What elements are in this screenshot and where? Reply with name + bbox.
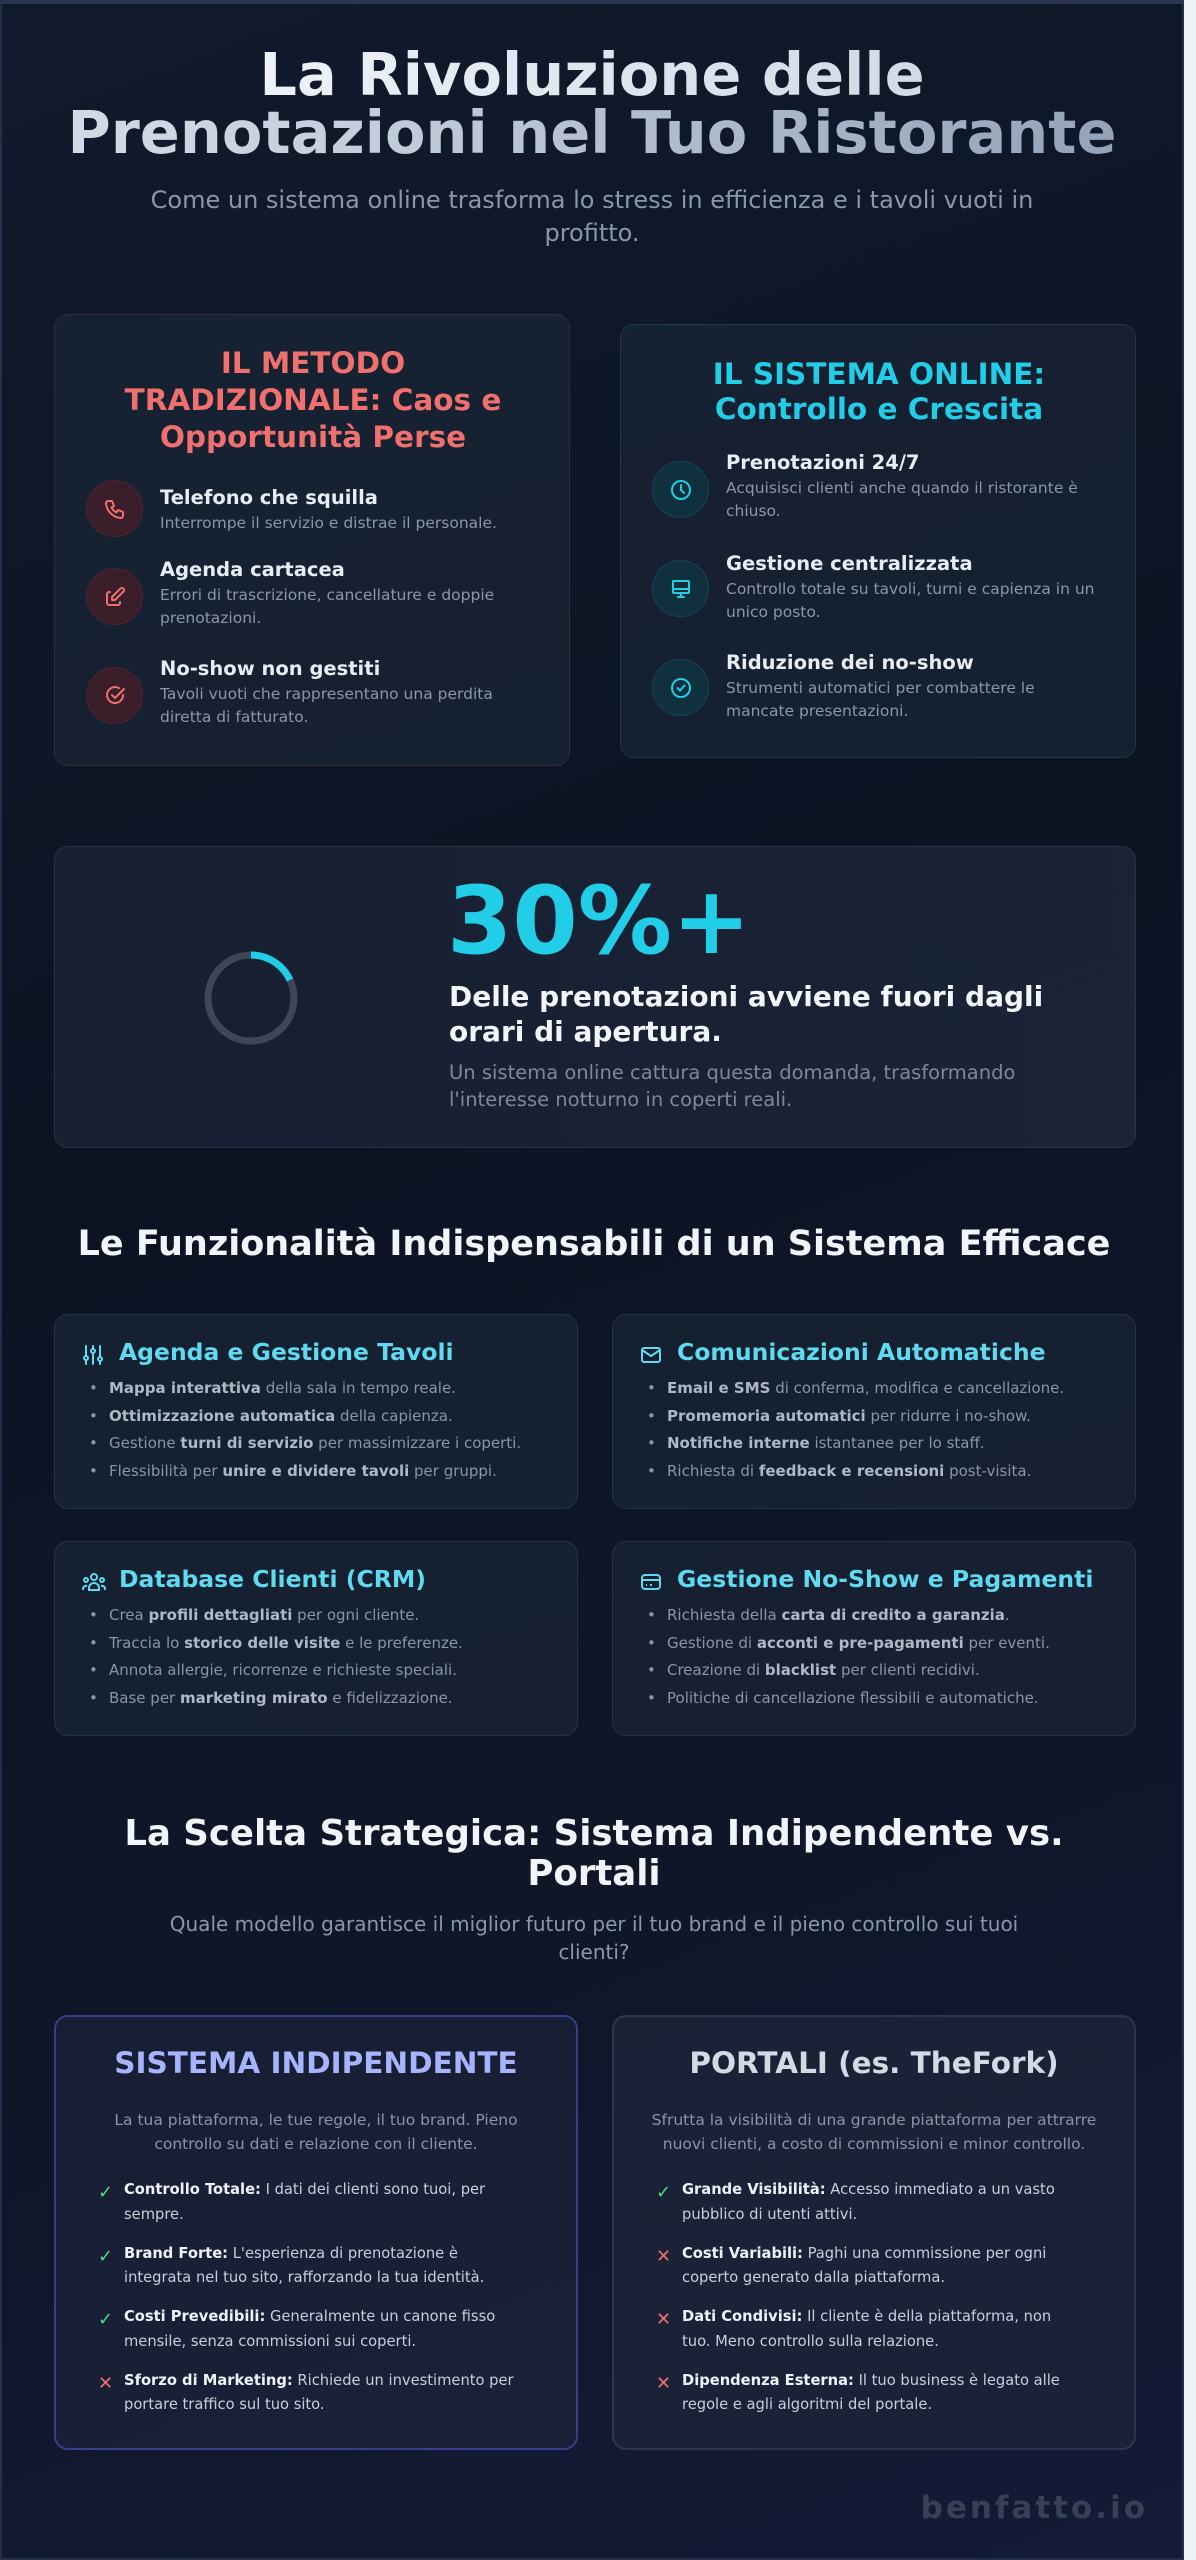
checklist [98,2181,514,2413]
heading: features: Le Funzionalità Indispensabili di un Sistema Efficace [78,1224,1110,1264]
checklist: Controllo Totale: I dati dei clienti sono tuoi, per sempre. [124,2181,485,2222]
bullet list: Promemoria automatici per ridurre i no-show. [667,1407,1031,1425]
bullet list: Crea profili dettagliati per ogni cliente. [109,1606,419,1624]
panel: online system: Controllo totale su tavoli, turni e capienza in un unico posto. [726,580,1094,621]
checklist: tuo. Meno controllo sulla relazione. [682,2332,939,2350]
checklist: ✕ [656,2246,671,2266]
stat description: Un sistema online cattura questa domanda, trasformando [449,1061,1015,1084]
checklist: ✕ [656,2309,671,2330]
bullet list: Annota allergie, ricorrenze e richieste speciali. [109,1661,457,1679]
panel: traditional method: Agenda cartacea [160,558,345,581]
panel: traditional method: Errori di trascrizione, cancellature e doppie prenotazioni. [160,586,494,627]
panel heading: online: Controllo e Crescita [715,392,1043,426]
checklist: ✓ [98,2182,113,2203]
bullet list: Richiesta della carta di credito a garanzia. [667,1606,1010,1624]
bullet list: Flessibilità per unire e dividere tavoli per gruppi. [109,1462,497,1480]
item: agenda [86,558,494,627]
bullet list: Base per marketing mirato e fidelizzazione. [109,1689,453,1707]
panel heading: SISTEMA INDIPENDENTE [114,2046,518,2080]
icon: clock [652,461,709,518]
panel: online system [620,324,1136,758]
checklist: Brand Forte: L'esperienza di prenotazione è [124,2244,458,2262]
title: Prenotazioni nel Tuo Ristorante [67,98,1117,167]
feature heading: Database Clienti (CRM) [119,1565,426,1593]
stat description: l'interesse notturno in coperti reali. [449,1088,792,1111]
item: centralized [652,552,1094,621]
icon: users [82,1573,106,1591]
panel: traditional method: Interrompe il servizio e distrae il personale. [160,514,497,532]
footer logo: benfatto.io [921,2490,1148,2526]
panel heading: PORTALI (es. TheFork) [689,2046,1059,2080]
bullet list: Gestione di acconti e pre-pagamenti per eventi. [667,1634,1050,1652]
heading: strategic choice: Portali [527,1853,661,1894]
checklist: ✓ [98,2246,113,2266]
bullet list: Richiesta di feedback e recensioni post-visita. [667,1462,1031,1480]
subtitle: Come un sistema online trasforma lo stress in efficienza e i tavoli vuoti in profitto. [151,186,1033,247]
checklist: ✓ [98,2309,113,2330]
icon: monitor [652,560,709,617]
checklist: Grande Visibilità: Accesso immediato a un vasto pubblico di utenti attivi. [682,2181,1055,2222]
panel: portals [612,2015,1136,2450]
bullet list: Politiche di cancellazione flessibili e automatiche. [667,1689,1039,1707]
checklist: Dipendenza Esterna: Il tuo business è legato alle regole e agli algoritmi del portale. [682,2372,1060,2413]
bullet list: Ottimizzazione automatica della capienza. [109,1407,453,1425]
panel: online system: Prenotazioni 24/7 [726,451,920,474]
panel: traditional method [54,314,570,766]
checklist: integrata nel tuo sito, rafforzando la tua identità. [124,2269,484,2286]
panel: communications [612,1314,1136,1509]
panel heading: traditional [124,346,501,454]
checklist: ✕ [656,2372,671,2394]
feature heading: Gestione No-Show e Pagamenti [677,1565,1093,1593]
checklist: Costi Variabili: Paghi una commissione per ogni coperto generato dalla piattaforma. [682,2244,1046,2286]
description: La tua piattaforma, le tue regole, il tuo brand. Pieno controllo su dati e relazione con il cliente. [114,2111,518,2152]
panel: online system: Gestione centralizzata [726,552,973,575]
item: no-show reduction [652,651,1035,720]
icon: edit [86,568,143,625]
panel: statistic [54,846,1136,1148]
panel: traditional method: Tavoli vuoti che rappresentano una perdita [160,685,493,703]
bullet list [649,1606,1050,1707]
bullet list: Gestione turni di servizio per massimizzare i coperti. [109,1434,521,1452]
stat text [449,980,1043,1048]
bullet list: Email e SMS di conferma, modifica e cancellazione. [667,1379,1064,1397]
panel heading: traditional: Opportunità Perse [160,420,466,454]
heading: strategic choice: La Scelta Strategica: Sistema Indipendente vs. [124,1813,1064,1854]
icon: check circle [86,667,143,724]
bullet list: Creazione di blacklist per clienti recidivi. [667,1661,980,1679]
panel: online system: Riduzione dei no-show [726,651,974,674]
stat text: orari di apertura. [449,1015,722,1048]
panel heading: online: IL SISTEMA ONLINE: [713,357,1045,391]
heading: strategic choice [124,1813,1064,1894]
checklist: portare traffico sul tuo sito. [124,2396,325,2413]
stat number: 30%+ [447,867,751,976]
panel: online system: Acquisisci clienti anche quando il ristorante è chiuso. [726,479,1078,520]
item: no-show [86,657,493,726]
panel: online system: Strumenti automatici per combattere le mancate presentazioni. [726,679,1035,720]
panel: traditional method: Telefono che squilla [160,486,378,509]
checklist: Costi Prevedibili: Generalmente un canone fisso mensile, senza commissioni sui coperti. [124,2308,495,2350]
panel heading: traditional: IL METODO [221,346,405,380]
title: La Rivoluzione delle [259,40,925,109]
checklist: ✓ [656,2182,671,2203]
panel: traditional method: diretta di fatturato. [160,708,308,726]
description: Sfrutta la visibilità di una grande piattaforma per attrarre nuovi clienti, a costo di commissioni e minor controllo. [652,2111,1096,2152]
bullet list: Mappa interattiva della sala in tempo reale. [109,1379,456,1397]
feature heading: Comunicazioni Automatiche [677,1338,1046,1366]
panel: CRM [54,1541,578,1736]
checklist: Sforzo di Marketing: Richiede un investimento per [124,2372,514,2388]
panel: independent system [54,2015,578,2450]
subtitle: strategic: Quale modello garantisce il miglior futuro per il tuo brand e il pieno controllo sui tuoi clienti? [170,1912,1018,1964]
panel heading: traditional: TRADIZIONALE: Caos e [125,383,501,417]
checklist: ✕ [98,2372,113,2394]
bullet list: Traccia lo storico delle visite e le preferenze. [109,1634,463,1652]
bullet list [649,1379,1064,1480]
checklist: Dati Condivisi: Il cliente è della piattaforma, non [682,2308,1051,2325]
icon: sliders [83,1345,103,1365]
stat description [449,1061,1015,1111]
item: telefono [86,480,497,537]
bullet list: Notifiche interne istantanee per lo staff. [667,1434,985,1452]
icon: mail [641,1347,661,1363]
item: 24/7 [652,451,1078,520]
checklist [656,2181,1060,2413]
panel: agenda [54,1314,578,1509]
icon: phone [86,480,143,537]
bullet list [91,1379,521,1480]
bullet list [91,1606,463,1707]
stat text: Delle prenotazioni avviene fuori dagli [449,980,1043,1013]
icon: check badge [652,659,709,716]
panel: no-show payments [612,1541,1136,1736]
feature heading: Agenda e Gestione Tavoli [119,1338,454,1366]
icon: card [641,1574,661,1590]
chart: ring [204,952,298,1044]
panel: traditional method: No-show non gestiti [160,657,380,680]
title [67,40,1117,167]
panel heading: online [713,357,1045,426]
